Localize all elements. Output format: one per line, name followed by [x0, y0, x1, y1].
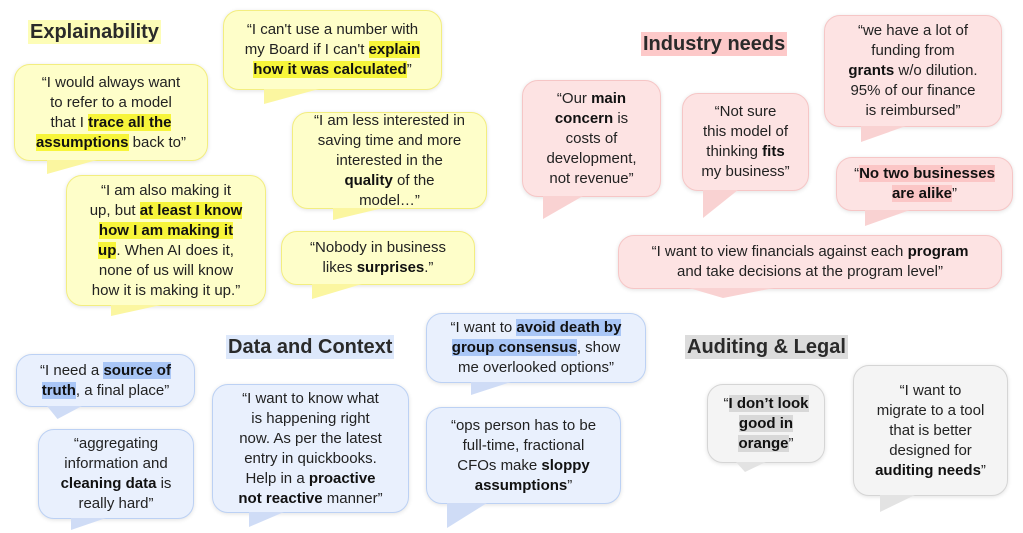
- quote: auditing needs: designed for: [889, 442, 972, 458]
- quote: no two businesses: [836, 157, 1013, 211]
- quote: explain calculation: my Board if I can't explain: [245, 41, 420, 58]
- quote: surprises: “Nobody in business: [310, 239, 446, 256]
- quote: making it up: how I am making it: [99, 222, 233, 238]
- quote: aggregating: really hard”: [78, 495, 154, 512]
- quote: aggregating: cleaning data is: [61, 475, 171, 492]
- quote: making it up: how it is making it up.”: [92, 282, 240, 298]
- quote: aggregating: [38, 429, 194, 519]
- quote: orange: “I don’t look: [724, 394, 808, 412]
- quote: grants: “we have a lot of: [858, 22, 968, 39]
- quote: explain calculation: how it was calculated”: [253, 61, 412, 78]
- quote: proactive: [212, 384, 409, 513]
- quote: explain calculation: “I can't use a number with: [247, 21, 418, 38]
- quote: trace assumptions: to refer to a model: [50, 94, 172, 110]
- quote: no two businesses: “No two businesses: [854, 165, 995, 182]
- quote: group consensus: me overlooked options”: [458, 359, 614, 376]
- quote: proactive: Help in a proactive: [245, 470, 376, 486]
- quote: model fits: thinking fits: [706, 143, 785, 160]
- quote: making it up: up. When AI does it,: [98, 242, 234, 258]
- quote: trace assumptions: [14, 64, 208, 161]
- quote: auditing needs: auditing needs”: [875, 462, 986, 478]
- title: Data and Context: Data and Context: [228, 336, 392, 358]
- quote: model fits: [682, 93, 809, 191]
- quote: sloppy assumptions: “ops person has to be: [451, 416, 596, 434]
- quote: aggregating: “aggregating: [74, 435, 158, 452]
- quote: trace assumptions: assumptions back to”: [36, 134, 186, 150]
- quote: sloppy assumptions: CFOs make sloppy: [457, 456, 590, 474]
- quote: model fits: my business”: [701, 163, 790, 180]
- quote: grants: [824, 15, 1002, 127]
- quote: trace assumptions: “I would always want: [42, 74, 180, 90]
- quote: proactive: now. As per the latest: [239, 430, 382, 446]
- quote: making it up: “I am also making it: [101, 182, 231, 198]
- quote: main concern: costs of: [566, 130, 617, 146]
- quote: proactive: entry in quickbooks.: [244, 450, 377, 466]
- quote: group consensus: “I want to avoid death by: [451, 319, 621, 336]
- quote: model fits: this model of: [703, 123, 788, 140]
- quote: main concern: development,: [546, 150, 637, 166]
- quote: main concern: not revenue”: [549, 170, 634, 186]
- quote: program level: [618, 235, 1002, 289]
- quote: explain calculation: [223, 10, 442, 90]
- quote: surprises: [281, 231, 475, 285]
- quote: quality of model: quality of the: [344, 172, 435, 188]
- quote: orange: good in: [739, 414, 793, 432]
- quote: grants: is reimbursed”: [865, 102, 960, 119]
- quote: sloppy assumptions: [426, 407, 621, 504]
- quote: grants: grants w/o dilution.: [848, 62, 978, 79]
- quote: aggregating: information and: [64, 455, 168, 472]
- title: Explainability: Explainability: [30, 21, 159, 43]
- quote: making it up: none of us will know: [99, 262, 233, 278]
- quote: group consensus: group consensus, show: [452, 339, 620, 356]
- quote: orange: [707, 384, 825, 463]
- quote: quality of model: “I am less interested in: [314, 112, 465, 128]
- quote: orange: orange”: [738, 434, 794, 452]
- quote: auditing needs: “I want to: [900, 382, 961, 398]
- quote: source of truth: truth, a final place”: [42, 382, 169, 398]
- quote: model fits: “Not sure: [715, 103, 776, 120]
- title: Industry needs: Industry needs: [643, 33, 785, 55]
- quote: proactive: not reactive manner”: [238, 490, 383, 506]
- title: Auditing & Legal: Auditing & Legal: [687, 336, 846, 358]
- quote: main concern: concern is: [555, 110, 628, 126]
- quote: auditing needs: migrate to a tool: [877, 402, 984, 418]
- quote: quality of model: saving time and more: [318, 132, 461, 148]
- quote: program level: “I want to view financials against each program: [652, 243, 968, 260]
- quote: grants: 95% of our finance: [850, 82, 976, 99]
- quote: main concern: “Our main: [557, 90, 626, 106]
- quote: sloppy assumptions: assumptions”: [475, 476, 572, 494]
- quote: source of truth: “I need a source of: [40, 362, 171, 378]
- quote: auditing needs: [853, 365, 1008, 496]
- quote: quality of model: [292, 112, 487, 209]
- quote: quality of model: interested in the: [336, 152, 443, 168]
- quote: main concern: [522, 80, 661, 197]
- quote: grants: funding from: [871, 42, 955, 59]
- quote: making it up: [66, 175, 266, 306]
- quote: quality of model: model…”: [359, 192, 420, 208]
- quote: auditing needs: that is better: [889, 422, 972, 438]
- quote: no two businesses: are alike”: [892, 185, 957, 202]
- quote: group consensus: [426, 313, 646, 383]
- quote: program level: and take decisions at the program level”: [677, 263, 943, 280]
- quote: proactive: is happening right: [251, 410, 370, 426]
- quote: proactive: “I want to know what: [242, 390, 379, 406]
- quote: sloppy assumptions: full-time, fractional: [463, 436, 584, 454]
- quote: making it up: up, but at least I know: [90, 202, 242, 218]
- quote: source of truth: [16, 354, 195, 407]
- quote: trace assumptions: that I trace all the: [51, 114, 171, 130]
- quote: surprises: likes surprises.”: [323, 259, 433, 276]
